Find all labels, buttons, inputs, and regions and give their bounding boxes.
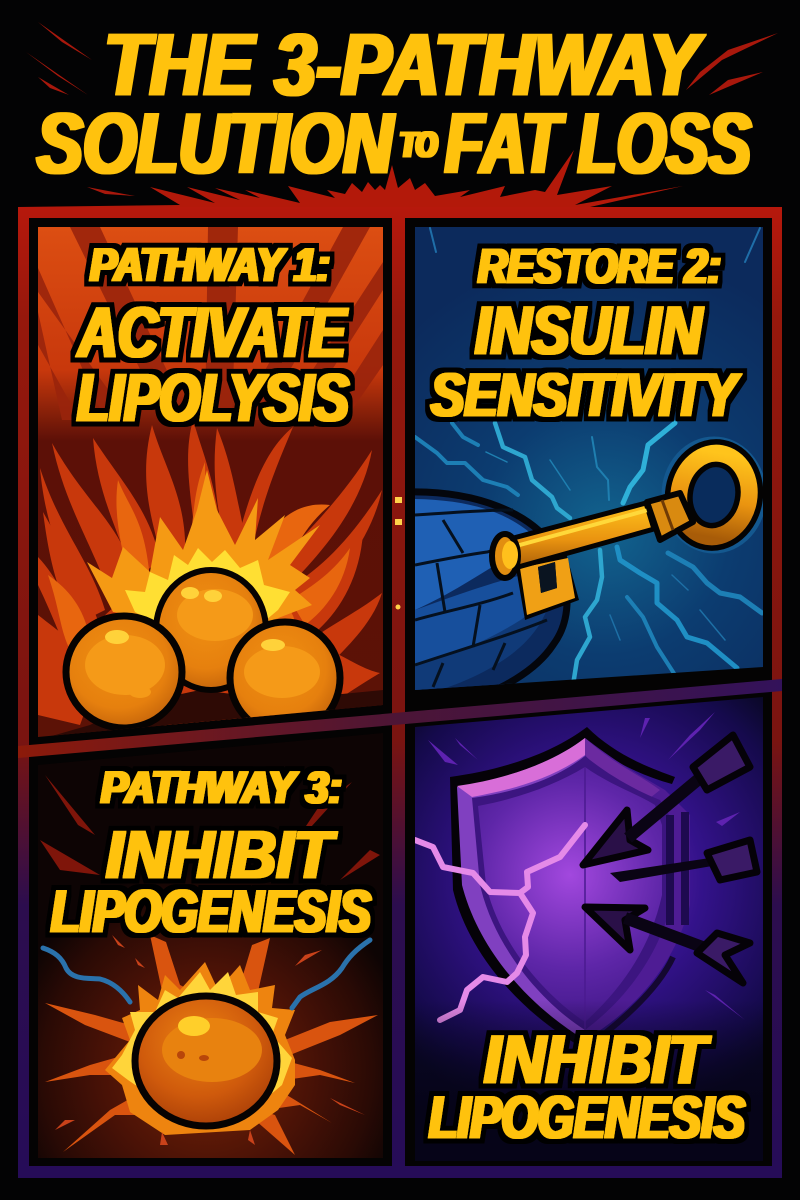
flame core gold (87, 470, 320, 625)
panel 3 heading: PATHWAY 3: (101, 762, 342, 813)
panel 3 heading: LIPOGENESIS (51, 878, 371, 945)
arrow middle (610, 840, 757, 882)
panel 1: activate lipolysis (38, 227, 383, 740)
panel 2 heading: SENSITIVITY (431, 361, 741, 429)
panel 1 heading: LIPOLYSIS (77, 360, 349, 436)
fat sphere (135, 996, 277, 1126)
fat sphere right (230, 622, 340, 734)
panel 1 heading (76, 238, 349, 436)
panel 3 heading (51, 762, 371, 945)
panel black backing (29, 218, 772, 1166)
panel 1 heading: PATHWAY 1: (90, 238, 330, 291)
golden key (492, 439, 764, 620)
embers (55, 935, 365, 1145)
arrow top (583, 735, 750, 865)
panel 2 heading: INSULIN (475, 292, 704, 369)
lower fade (415, 1000, 765, 1165)
burst yellow ring (112, 972, 292, 1095)
burst orange ring (105, 962, 295, 1135)
panel 4 heading (429, 1021, 745, 1151)
dark red rays (38, 227, 383, 420)
panel 2 heading: RESTORE 2: (478, 240, 721, 294)
title: THE 3-PATHWAY (104, 15, 705, 114)
title (37, 15, 751, 192)
title: SOLUTION (37, 96, 395, 192)
horizontal divider (18, 679, 782, 758)
dark red rays (40, 775, 380, 880)
panel 4: shield and arrows (415, 697, 765, 1165)
blue wisps (43, 940, 370, 1008)
lightning (415, 228, 762, 685)
stray yellow marks on divider (395, 497, 402, 610)
sparks (428, 712, 745, 1020)
fat sphere back (156, 570, 266, 690)
orange tongues (45, 935, 378, 1155)
panel 3: inhibit lipogenesis (38, 733, 383, 1160)
panel 4 heading: INHIBIT (484, 1021, 710, 1098)
arrow bottom (585, 907, 750, 983)
panel 3 heading: INHIBIT (106, 817, 337, 893)
flame tongues red (38, 420, 382, 730)
flame tongues orange (48, 462, 350, 646)
flame core yellow (125, 548, 290, 625)
panel 2: restore insulin sensitivity (405, 227, 765, 700)
shield (450, 727, 690, 1050)
panel 2 heading (431, 240, 741, 429)
panel 1 heading: ACTIVATE (76, 294, 348, 373)
crack (415, 825, 585, 1020)
ember floor (54, 690, 383, 736)
blue brick sphere (405, 492, 567, 700)
decorative red sparks around title (26, 22, 778, 196)
fat sphere left (66, 616, 182, 728)
title: TO (400, 124, 437, 165)
